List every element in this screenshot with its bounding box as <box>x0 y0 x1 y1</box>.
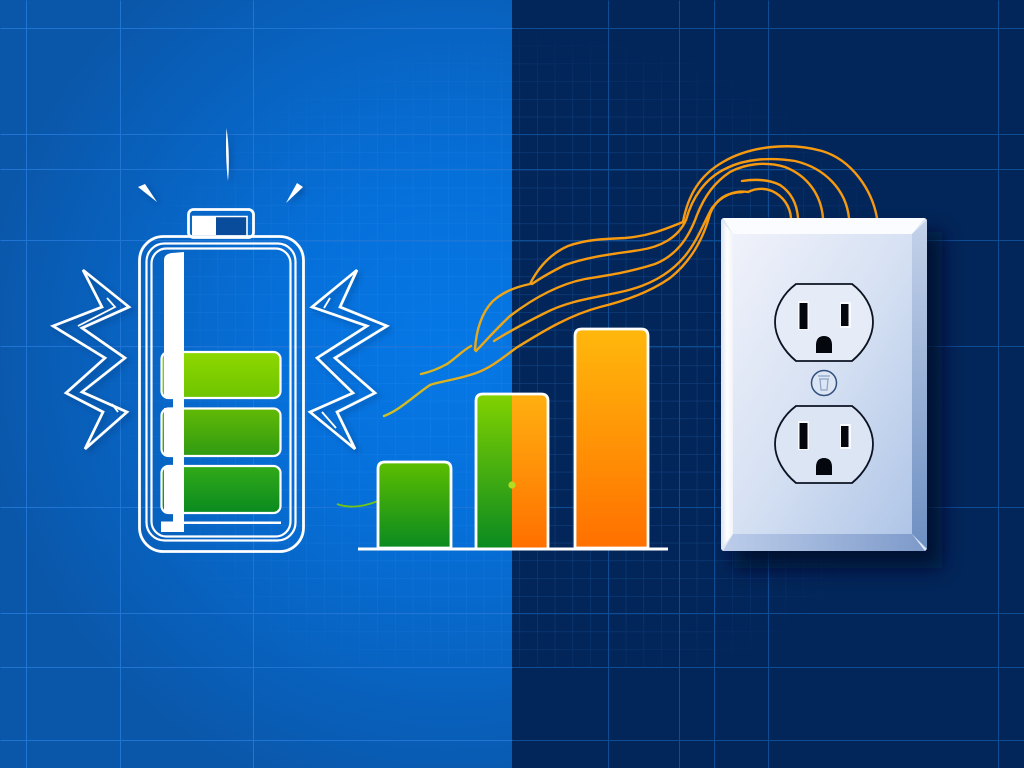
center screw <box>812 370 836 396</box>
bar three <box>575 329 648 548</box>
battery body outlines <box>140 236 304 552</box>
wire four <box>742 180 798 218</box>
charge cell middle <box>162 408 280 456</box>
wire six <box>384 192 743 416</box>
wall outlet plate shadow <box>734 232 942 568</box>
chart baseline <box>358 548 668 550</box>
battery cap <box>188 210 254 238</box>
battery icon <box>140 210 304 552</box>
midpoint dot <box>508 481 516 489</box>
charge cell top <box>162 352 280 398</box>
charge cell bottom <box>162 466 280 513</box>
wire two <box>532 159 849 284</box>
battery glare <box>262 249 289 479</box>
right slot <box>840 302 851 328</box>
ground hole <box>816 336 832 353</box>
background: right navy panel <box>512 0 1024 768</box>
lightning bolt right <box>310 270 387 449</box>
battery lightning and sparks <box>53 128 387 449</box>
lightning bolt left <box>53 270 129 449</box>
background: left blue panel <box>0 0 512 768</box>
green wire tail into first bar <box>337 501 378 507</box>
socket bottom <box>775 406 873 483</box>
spark left <box>138 184 157 202</box>
ground hole <box>816 458 832 475</box>
wire one <box>475 146 877 350</box>
spark right <box>286 183 303 203</box>
socket top <box>775 284 873 361</box>
wall outlet <box>721 218 927 551</box>
white highlight column <box>161 252 184 532</box>
plate face <box>733 234 912 534</box>
wire five <box>494 189 791 341</box>
battery bottom line <box>161 522 281 524</box>
plate bevel frame <box>721 218 927 551</box>
orange wires from outlet to battery <box>384 146 877 416</box>
wire three <box>421 164 823 374</box>
bar two <box>476 394 548 548</box>
left slot <box>798 421 809 450</box>
bar chart <box>358 329 668 550</box>
right slot <box>840 424 851 449</box>
spark top <box>226 128 229 181</box>
bar one <box>378 462 451 548</box>
left slot <box>798 301 809 330</box>
